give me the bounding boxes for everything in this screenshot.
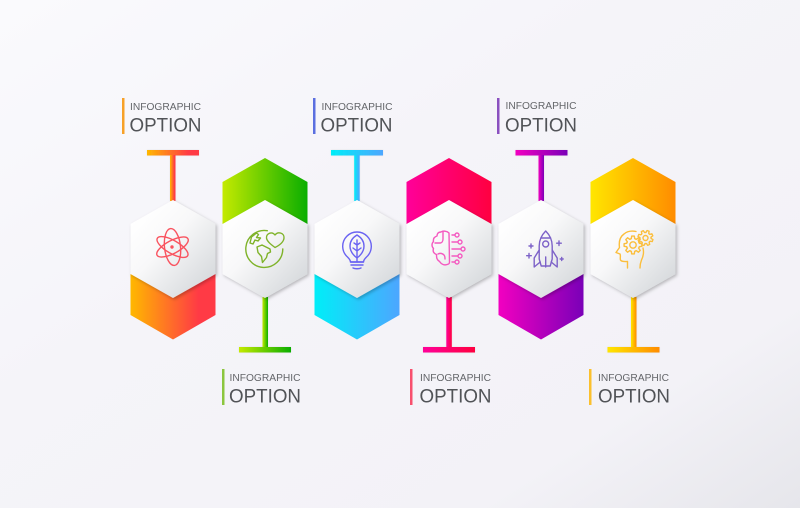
label 2: INFOGRAPHIC	[230, 372, 301, 384]
hexagon card 3	[314, 200, 400, 298]
label 1: OPTION	[130, 114, 202, 136]
connector T 2	[239, 297, 291, 352]
connector T 3	[331, 150, 383, 201]
icon: atom	[154, 228, 191, 266]
label 6: INFOGRAPHIC	[598, 372, 669, 384]
label 4	[410, 369, 492, 408]
label 5: INFOGRAPHIC	[506, 100, 577, 112]
icon: rocket with stars	[527, 231, 563, 267]
label 3: OPTION	[320, 114, 392, 136]
hexagon card 4	[406, 200, 492, 298]
colour block 4: pink to red	[406, 158, 492, 236]
label 2: OPTION	[229, 386, 301, 408]
connector T 6	[608, 297, 660, 352]
label 6	[589, 369, 670, 408]
label 6: OPTION	[598, 386, 670, 408]
connector T 5	[516, 150, 568, 201]
connector T 1	[147, 150, 199, 201]
hexagon card 6	[590, 200, 676, 298]
icon: head with gears	[616, 228, 655, 268]
icon: earth with heart	[246, 230, 284, 267]
colour block 1: orange to red	[130, 262, 216, 340]
label 4: INFOGRAPHIC	[420, 372, 491, 384]
colour block 3: cyan to blue	[314, 262, 400, 340]
hexagon card 1	[130, 200, 216, 298]
label 5	[497, 98, 577, 136]
label 1: INFOGRAPHIC	[130, 101, 201, 113]
label 3: INFOGRAPHIC	[322, 101, 393, 113]
label 2	[222, 369, 301, 408]
icon: light bulb with leaf	[343, 232, 371, 269]
hexagon card 5	[498, 200, 584, 298]
colour block 2: green	[222, 158, 308, 236]
label 5: OPTION	[505, 114, 577, 136]
label 3	[313, 98, 393, 136]
label 4: OPTION	[420, 386, 492, 408]
colour block 6: yellow to orange	[590, 158, 676, 236]
colour block 5: magenta to purple	[498, 262, 584, 340]
connector T 4	[423, 297, 475, 352]
hexagon card 2	[222, 200, 308, 298]
label 1	[122, 98, 202, 136]
icon: brain with circuit	[432, 231, 465, 265]
